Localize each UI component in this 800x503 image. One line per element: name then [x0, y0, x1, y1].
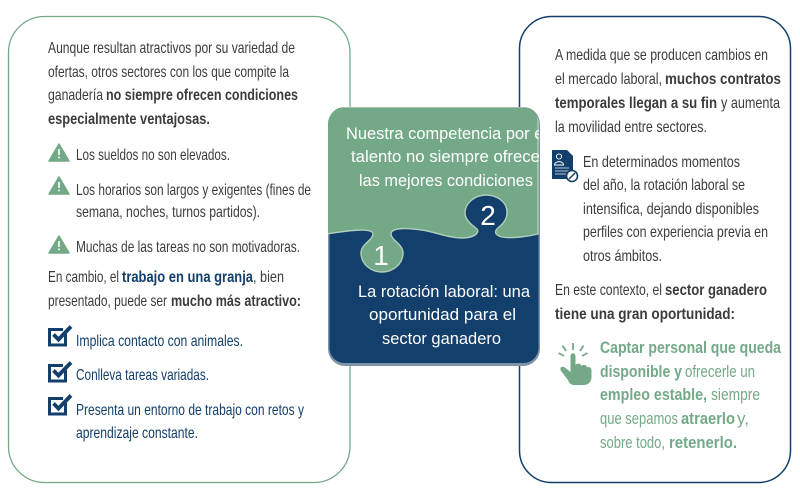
- text block: seasonal rotation: [583, 154, 768, 265]
- text block: context: tiene una gran oportunidad:: [555, 306, 735, 323]
- text block: farm work contrast: trabajo en una granja: [122, 269, 253, 286]
- warning list: [49, 144, 311, 256]
- callout: capture available staff: que sepamos: [600, 410, 678, 428]
- icon: warning triangle: [49, 236, 69, 253]
- heading: rotation opportunity: oportunidad para el: [369, 305, 516, 324]
- checklist: [50, 326, 304, 442]
- number 1: 1: [373, 240, 389, 271]
- text block: left introduction: ganadería: [48, 87, 103, 104]
- callout: capture available staff: empleo estable,: [600, 386, 707, 404]
- callout: capture available staff: ofrecerle un: [685, 363, 755, 381]
- text block: farm work contrast: mucho más atractivo:: [171, 293, 301, 310]
- panel: right, labour rotation: [520, 16, 790, 482]
- text block: right introduction: temporales llegan a su fin: [555, 95, 717, 112]
- text block: right introduction: el mercado laboral,: [555, 71, 662, 88]
- warning text: schedules: [76, 182, 311, 221]
- callout: capture available staff: y,: [737, 410, 749, 428]
- warning text: tasks: Muchas de las tareas no son motivadoras.: [76, 239, 300, 256]
- text block: seasonal rotation: intensifica, dejando disponibles: [583, 201, 759, 218]
- text block: left introduction: [48, 40, 298, 128]
- icon: warning triangle: [49, 177, 69, 194]
- callout: capture available staff: disponible y: [600, 363, 683, 381]
- puzzle piece: navy lower: [330, 107, 538, 363]
- icon: checkbox: [50, 396, 71, 414]
- icon: warning triangle: [49, 144, 69, 161]
- check text: varied tasks: Conlleva tareas variadas.: [76, 367, 209, 384]
- text block: right introduction: y aumenta: [721, 95, 780, 112]
- panel: left, competing sectors: [8, 16, 350, 482]
- icon: tapping hand: [558, 343, 592, 385]
- heading: competition: las mejores condiciones: [359, 171, 533, 190]
- heading: rotation opportunity: [358, 282, 531, 348]
- text block: farm work contrast: En cambio, el: [48, 269, 119, 286]
- center puzzle panel: [326, 107, 547, 366]
- text block: left introduction: ofertas, otros sectores con los que compite la: [48, 64, 289, 81]
- callout: capture available staff: sobre todo,: [600, 434, 665, 452]
- text block: seasonal rotation: En determinados momentos: [583, 154, 740, 171]
- heading: competition: [346, 124, 547, 190]
- heading: competition: Nuestra competencia por el: [346, 124, 547, 143]
- heading: rotation opportunity: sector ganadero: [382, 329, 501, 348]
- text block: left introduction: Aunque resultan atractivos por su variedad de: [48, 40, 295, 57]
- text block: left introduction: especialmente ventajosas.: [48, 111, 210, 128]
- check text: animals: Implica contacto con animales.: [76, 333, 243, 350]
- callout: capture available staff: atraerlo: [681, 410, 735, 428]
- check text: challenges: aprendizaje constante.: [76, 425, 198, 442]
- text block: left introduction: no siempre ofrecen condiciones: [106, 87, 298, 104]
- warning text: salaries: Los sueldos no son elevados.: [76, 147, 230, 164]
- text block: right introduction: [555, 47, 781, 136]
- callout: capture available staff: retenerlo.: [669, 434, 737, 452]
- text block: context: [555, 282, 767, 323]
- text block: farm work contrast: [48, 269, 301, 310]
- text block: seasonal rotation: del año, la rotación laboral se: [583, 177, 745, 194]
- warning text: schedules: Los horarios son largos y exigentes (fines de: [76, 182, 311, 199]
- text block: context: En este contexto, el: [555, 282, 662, 299]
- puzzle shadow: [328, 107, 540, 366]
- heading: rotation opportunity: La rotación laboral: una: [358, 282, 531, 301]
- icon: document with profile and blocked sign: [552, 150, 578, 182]
- callout: capture available staff: siempre: [711, 386, 760, 404]
- warning text: schedules: semana, noches, turnos partidos).: [76, 204, 260, 221]
- text block: farm work contrast: , bien: [253, 269, 284, 286]
- text block: right introduction: la movilidad entre sectores.: [555, 119, 707, 136]
- heading: competition: talento no siempre ofrece: [351, 147, 540, 166]
- check text: challenges: Presenta un entorno de trabajo con retos y: [76, 402, 304, 419]
- text block: seasonal rotation: otros ámbitos.: [583, 248, 662, 265]
- number 2: 2: [480, 200, 496, 231]
- text block: context: sector ganadero: [665, 282, 767, 299]
- icon: checkbox: [50, 362, 71, 381]
- check text: challenges: [76, 402, 304, 442]
- text block: farm work contrast: presentado, puede ser: [48, 293, 167, 310]
- text block: right introduction: muchos contratos: [665, 71, 781, 88]
- puzzle piece: green upper with tab 1 and socket 2: [326, 107, 538, 272]
- icon: checkbox: [50, 326, 71, 345]
- callout: capture available staff: [600, 339, 782, 452]
